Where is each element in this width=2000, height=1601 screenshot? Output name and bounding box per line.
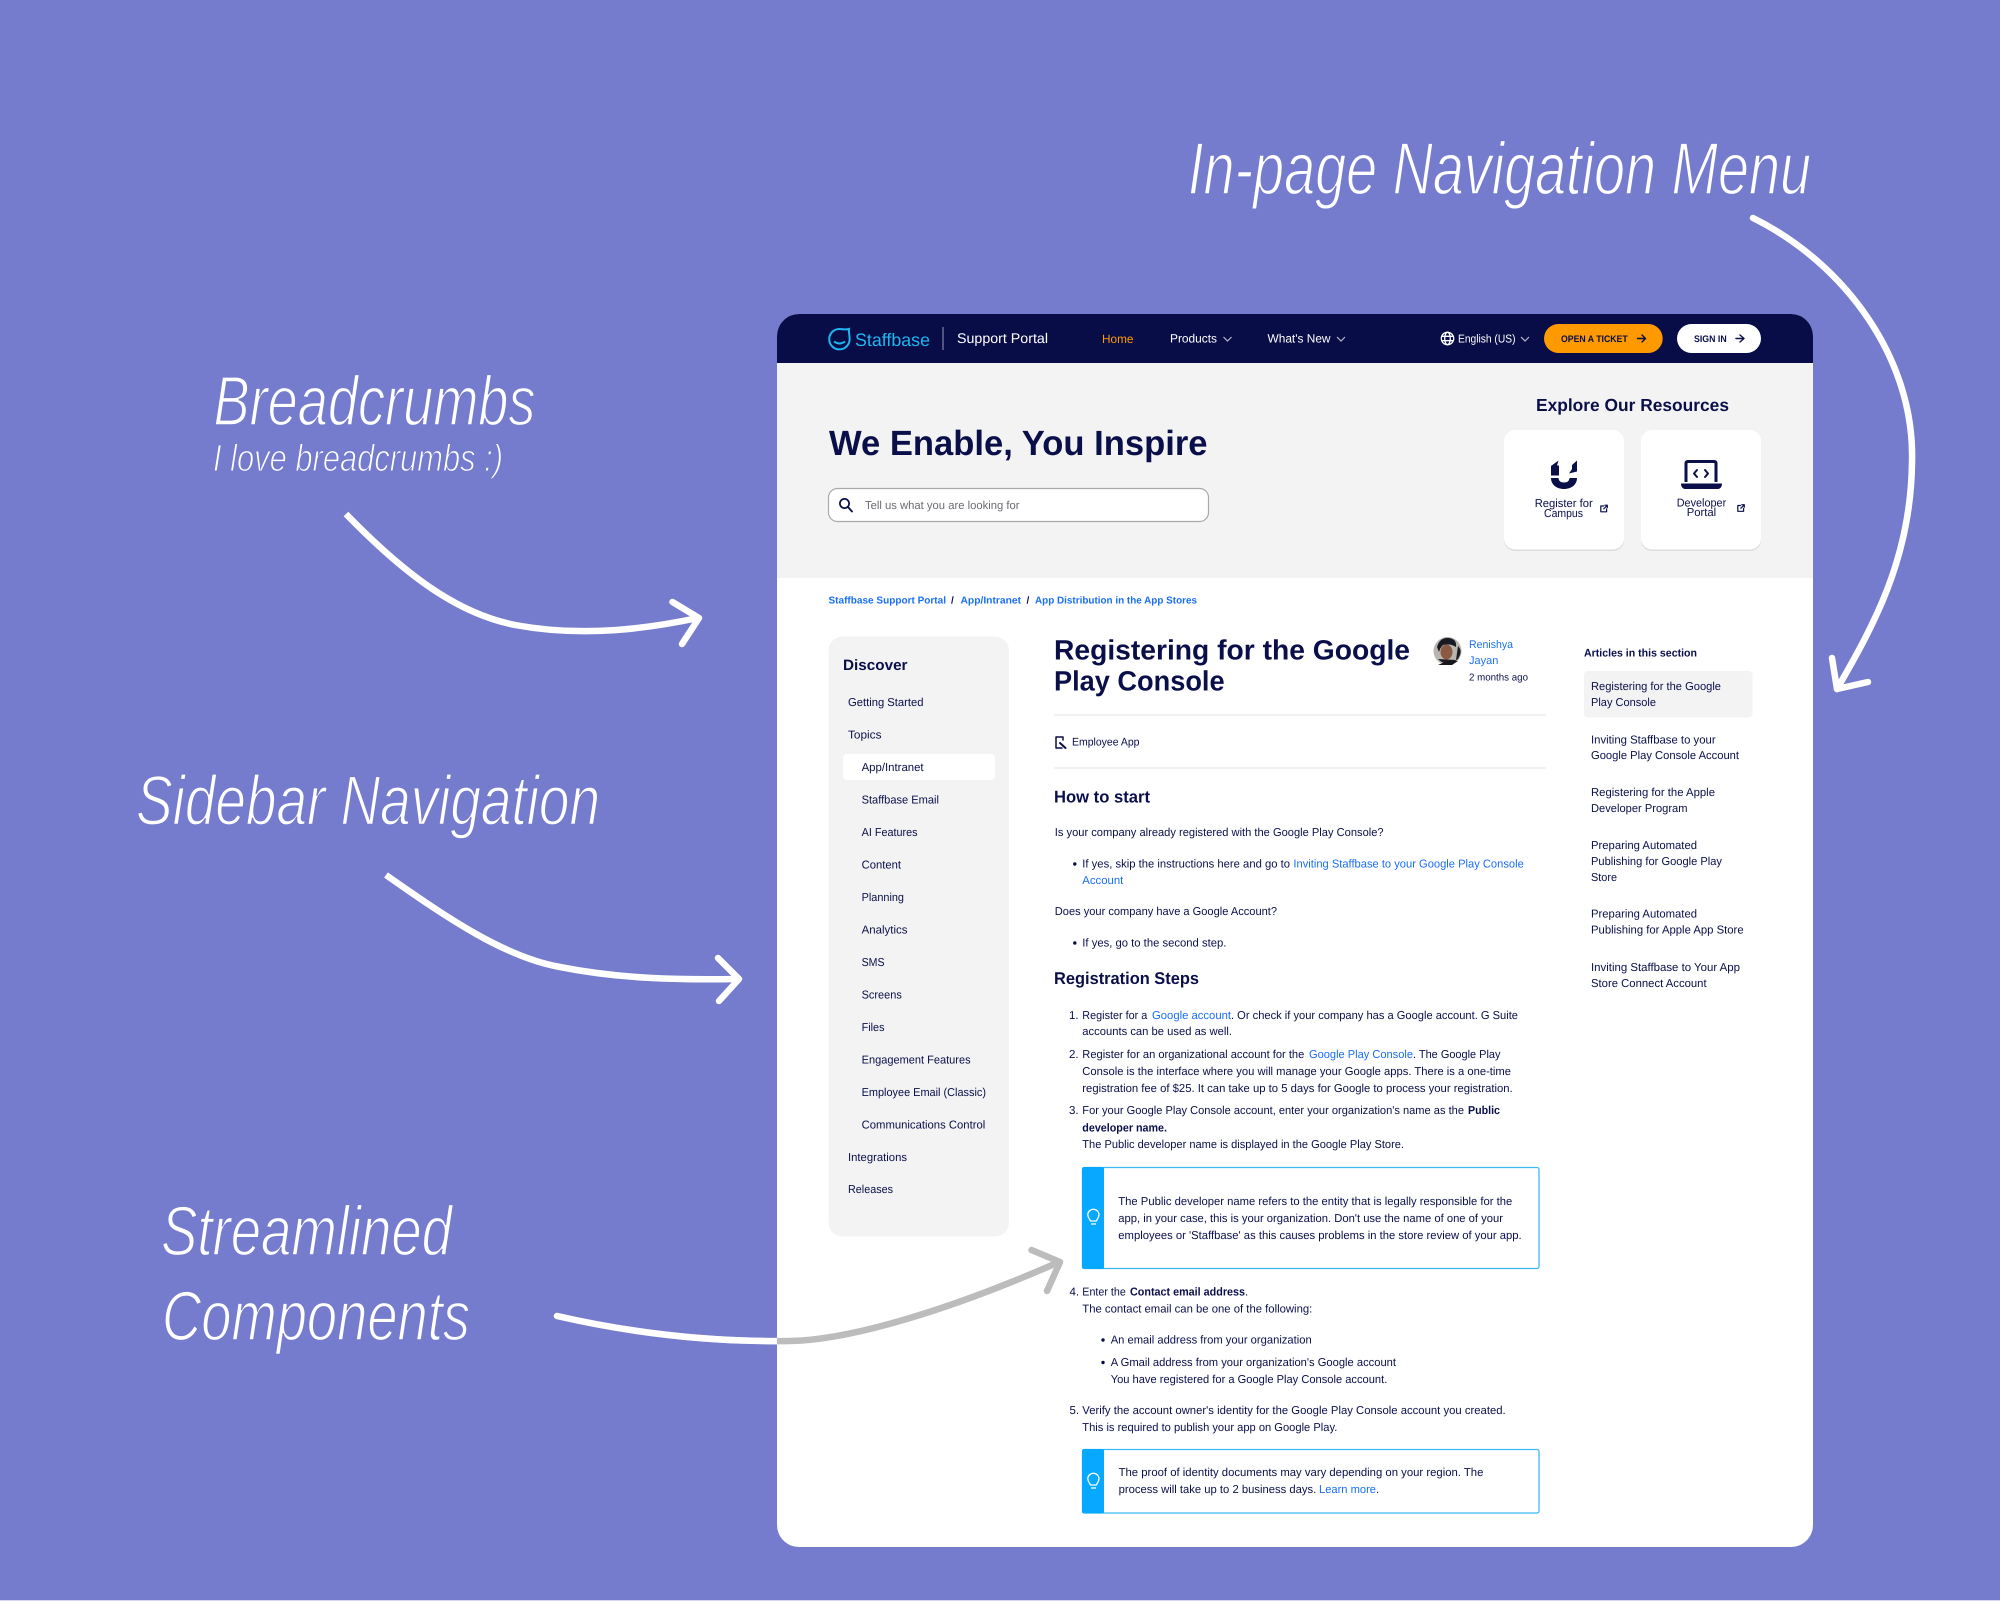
- label: Streamlined Components: Streamlined: [161, 1192, 454, 1270]
- article: steps 4 and 5: Contact email address: [1130, 1286, 1245, 1298]
- nav link: Home: Home: [1102, 332, 1134, 346]
- callout: public developer name: app, in your case, this is your organization. Don't use the name of one of your: [1118, 1213, 1503, 1225]
- article: How to start: If yes, go to the second step.: [1082, 938, 1226, 950]
- panel: sidebar navigation: Getting Started: [848, 697, 924, 709]
- panel: sidebar navigation: Employee Email (Classic): [862, 1087, 986, 1099]
- button: open a ticket: [1544, 324, 1663, 353]
- panel: articles in this section: [1584, 648, 1752, 990]
- panel: sidebar navigation: Analytics: [862, 924, 908, 936]
- sidebar heading: Discover: [843, 657, 908, 674]
- breadcrumbs: /: [951, 596, 954, 606]
- author details: Jayan: [1469, 655, 1498, 667]
- panel: articles in this section: Google Play Console Account: [1591, 750, 1740, 762]
- callout: proof of identity: [1082, 1449, 1539, 1514]
- article: steps 4 and 5: .: [1245, 1286, 1248, 1298]
- panel: sidebar navigation: Releases: [848, 1184, 893, 1196]
- arrow: in-page navigation: [1753, 218, 1912, 689]
- breadcrumbs: /: [1026, 596, 1030, 606]
- callout: proof of identity: .: [1376, 1484, 1379, 1496]
- button: open a ticket: OPEN A TICKET: [1561, 334, 1628, 345]
- panel: sidebar navigation: Files: [862, 1022, 885, 1034]
- panel: sidebar navigation: Communications Control: [862, 1120, 985, 1132]
- search box: [828, 488, 1208, 522]
- nav link: What's New: What's New: [1268, 332, 1331, 346]
- label: Breadcrumbs: I love breadcrumbs :): [213, 438, 503, 480]
- logo wordmark: Staffbase: [855, 330, 930, 350]
- panel: sidebar navigation: AI Features: [862, 827, 918, 839]
- panel: articles in this section: Registering for the Google: [1591, 681, 1721, 693]
- panel: articles in this section: Articles in this section: [1584, 648, 1697, 660]
- article: Registration Steps: 3.: [1069, 1105, 1079, 1117]
- article: Registration Steps: Registration Steps: [1054, 969, 1199, 988]
- author avatar: [1434, 637, 1462, 665]
- panel: articles in this section: Publishing for Apple App Store: [1591, 924, 1744, 936]
- icon: magnet: [1551, 460, 1577, 489]
- article: Registration Steps: Register for an organizational account for the: [1082, 1049, 1304, 1061]
- author details: 2 months ago: [1469, 673, 1528, 684]
- panel: articles in this section: Inviting Staffbase to Your App: [1591, 962, 1740, 974]
- panel: sidebar navigation: SMS: [862, 957, 885, 969]
- article title: Registering for the Google: [1054, 634, 1410, 666]
- author details: [1469, 639, 1528, 684]
- portal name: Support Portal: [957, 330, 1048, 346]
- panel: sidebar navigation: Staffbase Email: [862, 794, 939, 806]
- breadcrumbs: App/Intranet: [960, 596, 1022, 606]
- resource card: Register for Campus: Register for: [1535, 498, 1593, 510]
- language selector: English (US): [1458, 334, 1516, 346]
- button: sign in: [1677, 324, 1761, 353]
- resource card: Developer Portal: [1641, 430, 1761, 551]
- author details: Renishya: [1469, 639, 1514, 651]
- icon: light bulb: [1088, 1473, 1099, 1488]
- article: steps 4 and 5: [1070, 1286, 1506, 1434]
- resource card: Developer Portal: Portal: [1687, 507, 1716, 519]
- article title: [1054, 634, 1410, 696]
- article: steps 4 and 5: You have registered for a Google Play Console account.: [1111, 1374, 1387, 1386]
- navigation bar: [829, 324, 1761, 353]
- panel: sidebar navigation: App/Intranet: [862, 762, 924, 774]
- article: Registration Steps: Console is the interface where you will manage your Google apps. There is a one-time: [1082, 1066, 1511, 1078]
- button: sign in: SIGN IN: [1694, 334, 1727, 345]
- article: Registration Steps: The Public developer name is displayed in the Google Play Store.: [1082, 1139, 1404, 1151]
- article title: Play Console: [1054, 666, 1225, 696]
- article: How to start: How to start: [1054, 787, 1150, 806]
- callout: public developer name: The Public developer name refers to the entity that is legally responsible for the: [1118, 1196, 1512, 1208]
- article: steps 4 and 5: 5.: [1070, 1405, 1079, 1417]
- article: How to start: If yes, skip the instructions here and go to: [1082, 858, 1290, 870]
- product tag: Employee App: Employee App: [1072, 737, 1140, 749]
- resource card: Register for Campus: [1504, 430, 1624, 551]
- active item highlight: [843, 754, 995, 780]
- article: Registration Steps: . Or check if your company has a Google account. G Suite: [1231, 1010, 1518, 1022]
- article: How to start: Account: [1082, 875, 1124, 887]
- hero heading: We Enable, You Inspire: [829, 424, 1208, 463]
- article: steps 4 and 5: This is required to publish your app on Google Play.: [1082, 1422, 1337, 1434]
- panel: articles in this section: Preparing Automated: [1591, 840, 1697, 852]
- nav link: Products: Products: [1170, 332, 1217, 346]
- arrow: streamlined components: [557, 1250, 1060, 1341]
- resources heading: Explore Our Resources: [1536, 395, 1729, 415]
- article: Registration Steps: Google account: [1152, 1010, 1232, 1022]
- article: How to start: [1054, 787, 1524, 950]
- article: Registration Steps: developer name.: [1082, 1122, 1167, 1134]
- article: Registration Steps: registration fee of $25. It can take up to 5 days for Google to process your registration.: [1082, 1083, 1513, 1095]
- label: In-page Navigation Menu: In-page Navigation Menu: [1188, 127, 1811, 210]
- panel: sidebar navigation: Planning: [862, 892, 904, 904]
- icon: laptop code: [1681, 462, 1722, 489]
- panel: articles in this section: Store Connect Account: [1591, 978, 1707, 990]
- panel: sidebar navigation: Integrations: [848, 1152, 907, 1164]
- article: Registration Steps: accounts can be used as well.: [1082, 1026, 1232, 1038]
- article: Registration Steps: 2.: [1069, 1049, 1079, 1061]
- article: Registration Steps: For your Google Play Console account, enter your organization's name as the: [1082, 1105, 1464, 1117]
- panel: articles in this section: Preparing Automated: [1591, 908, 1697, 920]
- panel: sidebar navigation: Screens: [862, 990, 902, 1002]
- search box: Tell us what you are looking for: [865, 500, 1020, 512]
- callout: public developer name: [1082, 1167, 1539, 1269]
- article: steps 4 and 5: A Gmail address from your organization's Google account: [1111, 1357, 1397, 1369]
- article: steps 4 and 5: Enter the: [1082, 1286, 1126, 1298]
- panel: articles in this section: Registering for the Apple: [1591, 787, 1715, 799]
- article: steps 4 and 5: 4.: [1070, 1286, 1079, 1298]
- article: How to start: Inviting Staffbase to your Google Play Console: [1293, 858, 1524, 870]
- label: Streamlined Components: [161, 1192, 470, 1355]
- arrow: sidebar navigation: [386, 875, 739, 1001]
- article: Registration Steps: . The Google Play: [1413, 1049, 1501, 1061]
- icon: light bulb: [1088, 1209, 1099, 1224]
- panel: articles in this section: Developer Program: [1591, 803, 1688, 815]
- label: Breadcrumbs: [213, 362, 536, 480]
- label: Breadcrumbs: Breadcrumbs: [214, 362, 536, 440]
- resource card: Developer Portal: Developer: [1677, 498, 1726, 510]
- article: steps 4 and 5: The contact email can be one of the following:: [1082, 1303, 1312, 1315]
- article: How to start: Does your company have a Google Account?: [1055, 906, 1277, 918]
- article: How to start: Is your company already registered with the Google Play Console?: [1055, 827, 1384, 839]
- breadcrumbs: App Distribution in the App Stores: [1035, 596, 1197, 606]
- panel: sidebar navigation: Content: [862, 860, 902, 872]
- arrow: breadcrumbs: [346, 514, 699, 644]
- article: Registration Steps: Public: [1468, 1105, 1501, 1117]
- label: Sidebar Navigation: Sidebar Navigation: [136, 762, 600, 840]
- callout: proof of identity: Learn more: [1319, 1484, 1376, 1496]
- article: steps 4 and 5: Verify the account owner's identity for the Google Play Console account you created.: [1082, 1405, 1506, 1417]
- resource card: Register for Campus: Campus: [1544, 508, 1583, 520]
- article: steps 4 and 5: An email address from your organization: [1111, 1334, 1312, 1346]
- article: Registration Steps: [1054, 969, 1518, 1151]
- panel: support portal page: [777, 314, 1813, 1547]
- panel: sidebar navigation: Topics: [848, 730, 882, 742]
- panel: articles in this section: Publishing for Google Play: [1591, 856, 1722, 868]
- panel: articles in this section: Inviting Staffbase to your: [1591, 734, 1716, 746]
- article: Registration Steps: 1.: [1069, 1010, 1079, 1022]
- breadcrumbs: Staffbase Support Portal: [828, 596, 946, 606]
- panel: articles in this section: Play Console: [1591, 697, 1656, 709]
- callout: proof of identity: process will take up to 2 business days.: [1119, 1484, 1316, 1496]
- language selector: [1441, 332, 1529, 346]
- breadcrumbs: [828, 596, 1197, 606]
- callout: proof of identity: The proof of identity documents may vary depending on your region. The: [1119, 1467, 1483, 1479]
- article: Registration Steps: Google Play Console: [1309, 1049, 1413, 1061]
- icon: Staffbase logo: [829, 329, 850, 349]
- panel: sidebar navigation: [828, 636, 1009, 1236]
- panel: sidebar navigation: Engagement Features: [862, 1054, 971, 1066]
- callout: public developer name: employees or 'Staffbase' as this causes problems in the store review of your app.: [1118, 1230, 1522, 1242]
- panel: articles in this section: Store: [1591, 872, 1617, 884]
- label: Streamlined Components: Components: [162, 1277, 470, 1355]
- article: Registration Steps: Register for a: [1082, 1010, 1148, 1022]
